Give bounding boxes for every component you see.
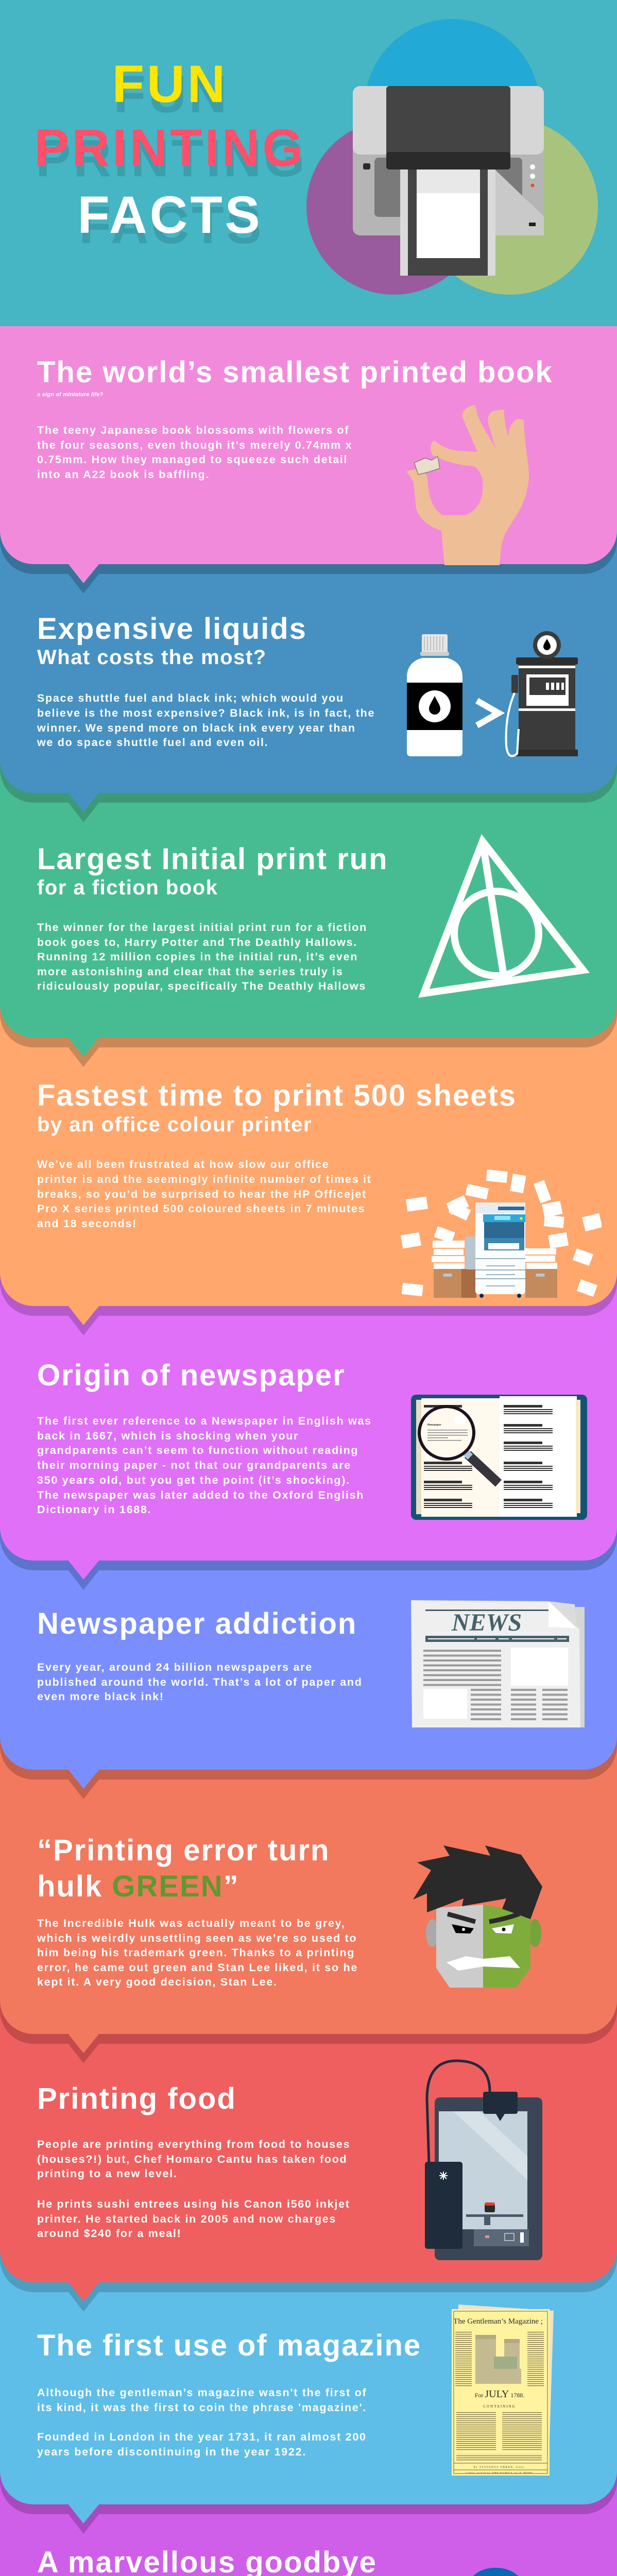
heading: Origin of newspaper <box>37 1359 346 1392</box>
title word: PRINTING: PRINTING <box>34 118 306 177</box>
text block: grandparents can’t seem to function without reading <box>37 1444 358 1456</box>
heading: “Printing error turn <box>37 1834 330 1867</box>
panel: printing error hulk green <box>0 456 617 2063</box>
title word: FUN: FUN <box>112 55 228 113</box>
heading: The first use of magazine <box>37 2329 421 2362</box>
text block: Space shuttle fuel and black ink; which would you <box>37 692 344 704</box>
text block: He prints sushi entrees using his Canon i560 inkjet <box>37 2198 350 2210</box>
text block: years before discontinuing in the year 1922. <box>37 2446 306 2458</box>
text block: error, he came out green and Stan Lee liked, it so he <box>37 1961 358 1974</box>
heading: Newspaper addiction <box>37 1607 357 1640</box>
text block: The newspaper was later added to the Oxford English <box>37 1489 364 1501</box>
text block <box>37 1917 358 1988</box>
panel: expensive liquids <box>0 456 617 822</box>
icon: header printer with circles <box>306 19 598 295</box>
icon: gentleman's magazine cover <box>452 2304 554 2476</box>
text block: which is weirdly unsettling seen as we’re so used to <box>37 1932 357 1944</box>
text block: The Incredible Hulk was actually meant to be grey, <box>37 1917 345 1929</box>
icon: gentleman's magazine cover: The Gentleman’s Magazine ; <box>453 2317 543 2326</box>
text block: Dictionary in 1688. <box>37 1503 151 1516</box>
icon: newspaper <box>411 1600 585 1727</box>
panel: smallest printed book <box>0 326 617 594</box>
panel: fastest time to print <box>0 456 617 1335</box>
text block: ridiculously popular, specifically The Deathly Hallows <box>37 980 366 992</box>
text block: more astonishing and clear that the series truly is <box>37 965 343 978</box>
panel: largest initial print run <box>0 456 617 1067</box>
heading <box>37 1834 330 1903</box>
text block: The winner for the largest initial print run for a fiction <box>37 921 367 934</box>
text block: around $240 for a meal! <box>37 2227 181 2240</box>
text block <box>37 2431 367 2458</box>
icon: gentleman's magazine cover: London, printed by JOHN NICHOLS, for D. HENRY. <box>466 2471 534 2475</box>
text block: Running 12 million copies in the initial run, it’s even <box>37 951 358 963</box>
text block: winner. We spend more on black ink every year than <box>37 722 356 734</box>
text block: People are printing everything from food to houses <box>37 2138 350 2150</box>
icon: office printer with flying paper <box>401 1170 602 1298</box>
heading: The world’s smallest printed book <box>37 355 553 389</box>
text block: Founded in London in the year 1731, it ran almost 200 <box>37 2431 367 2443</box>
text block <box>37 2198 350 2240</box>
heading: Largest Initial print run <box>37 842 388 876</box>
text block: printing to a new level. <box>37 2167 178 2180</box>
text block <box>37 2386 367 2414</box>
text block: breaks, so you’d be surprised to hear the HP Officejet <box>37 1188 367 1200</box>
text block: Although the gentleman’s magazine wasn't the first of <box>37 2386 367 2399</box>
text block: into an A22 book is baffling. <box>37 468 210 480</box>
heading: hulk GREEN” <box>37 1870 239 1903</box>
subheading: by an office colour printer <box>37 1113 312 1136</box>
text block: believe is the most expensive? Black ink, is in fact, the <box>37 707 375 719</box>
icon: captain america <box>473 2568 518 2576</box>
text block: back in 1667, which is shocking when your <box>37 1430 299 1442</box>
text block: 350 years old, but you get the point (it’s shocking). <box>37 1474 350 1486</box>
text block: 0.75mm. How they managed to squeeze such detail <box>37 453 348 466</box>
header title <box>34 55 306 244</box>
subheading: What costs the most? <box>37 646 267 669</box>
icon: hulk face <box>413 1845 542 1988</box>
icon: open book with magnifier <box>411 1395 587 1520</box>
text block: Every year, around 24 billion newspapers are <box>37 1661 313 1673</box>
icon: open book with magnifier: Newspaper <box>427 1423 441 1427</box>
text block: its kind, it was the first to coin the phrase 'magazine'. <box>37 2401 367 2414</box>
text block: even more black ink! <box>37 1690 164 1703</box>
icon: deathly hallows <box>418 834 590 998</box>
text block <box>37 1415 372 1516</box>
panel: origin of newspaper <box>0 456 617 1590</box>
text block <box>37 1158 372 1230</box>
text block: the four seasons, even though it’s merely 0.74mm x <box>37 439 352 451</box>
text block: We’ve all been frustrated at how slow our office <box>37 1158 329 1171</box>
text block: published around the world. That’s a lot of paper and <box>37 1675 363 1688</box>
icon: 3d printer with sushi <box>425 2060 542 2260</box>
text block: him being his trademark green. Thanks to a printing <box>37 1946 355 1959</box>
text block: Pro X series printed 500 coloured sheets in 7 minutes <box>37 1202 365 1215</box>
subheading: a sign of miniature life? <box>37 392 103 398</box>
text block <box>37 1661 363 1703</box>
text block <box>37 2138 350 2180</box>
text block: The teeny Japanese book blossoms with flowers of <box>37 424 349 436</box>
text block <box>37 921 367 992</box>
icon: ink bottle greater than fuel pump <box>407 631 578 757</box>
text block: book goes to, Harry Potter and The Deathly Hallows. <box>37 936 357 948</box>
text block: their morning paper - not that our grandparents are <box>37 1459 351 1471</box>
panel: printing food <box>0 456 617 2312</box>
text block: (houses?!) but, Chef Homaro Cantu has taken food <box>37 2153 347 2165</box>
icon: gentleman's magazine cover: For JULY 1788. <box>475 2388 524 2400</box>
icon: hand holding tiny book <box>407 405 529 565</box>
text block: we do space shuttle fuel and even oil. <box>37 736 268 749</box>
text block <box>37 424 352 480</box>
text block: printer is and the seemingly infinite number of times it <box>37 1173 372 1185</box>
text block: printer. He started back in 2005 and now charges <box>37 2213 336 2225</box>
title word: FACTS: FACTS <box>77 185 263 244</box>
panel: newspaper addiction <box>0 456 617 1799</box>
icon: gentleman's magazine cover: CONTAINING <box>483 2404 516 2409</box>
heading: Printing food <box>37 2082 236 2115</box>
text block: kept it. A very good decision, Stan Lee. <box>37 1976 278 1988</box>
text block <box>37 692 375 749</box>
subheading: for a fiction book <box>37 876 218 899</box>
icon: newspaper: NEWS <box>451 1609 522 1636</box>
heading: Fastest time to print 500 sheets <box>37 1079 517 1112</box>
text block: and 18 seconds! <box>37 1217 137 1230</box>
heading: Expensive liquids <box>37 612 307 646</box>
icon: gentleman's magazine cover: By SYLVANUS URBAN, Gent. <box>474 2466 525 2469</box>
text block: The first ever reference to a Newspaper in English was <box>37 1415 372 1427</box>
